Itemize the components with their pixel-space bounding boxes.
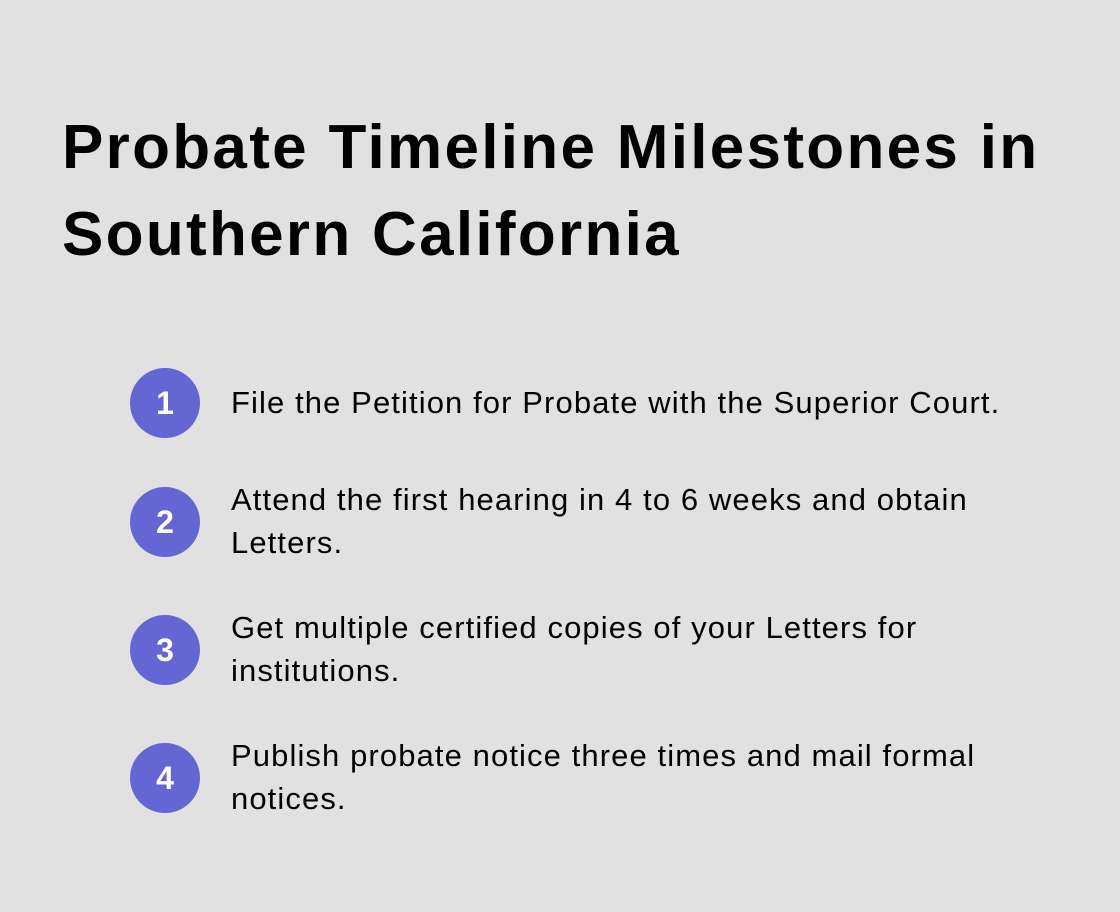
text 4: Publish probate notice three times and mail formal [231, 738, 975, 773]
title: Probate Timeline Milestones in [62, 113, 1039, 182]
text 4 [231, 738, 975, 816]
circle 4: 4 [156, 760, 174, 796]
circle 1 [130, 368, 200, 438]
text 1: File the Petition for Probate with the Superior Court. [231, 385, 1000, 420]
text 2: Attend the first hearing in 4 to 6 weeks and obtain [231, 482, 968, 517]
text 3 [231, 610, 917, 688]
text 4: notices. [231, 781, 347, 816]
step 3 [130, 610, 917, 688]
circle 3 [130, 615, 200, 685]
circle 3: 3 [156, 632, 174, 668]
text 3: institutions. [231, 653, 400, 688]
circle 2: 2 [156, 504, 174, 540]
text 2 [231, 482, 968, 560]
text 2: Letters. [231, 525, 343, 560]
title: Southern California [62, 200, 681, 269]
title [62, 113, 1039, 269]
step 2 [130, 482, 968, 560]
circle 4 [130, 743, 200, 813]
text 3: Get multiple certified copies of your Letters for [231, 610, 917, 645]
circle 1: 1 [156, 385, 174, 421]
step 1 [130, 368, 1000, 438]
circle 2 [130, 487, 200, 557]
step 4 [130, 738, 975, 816]
